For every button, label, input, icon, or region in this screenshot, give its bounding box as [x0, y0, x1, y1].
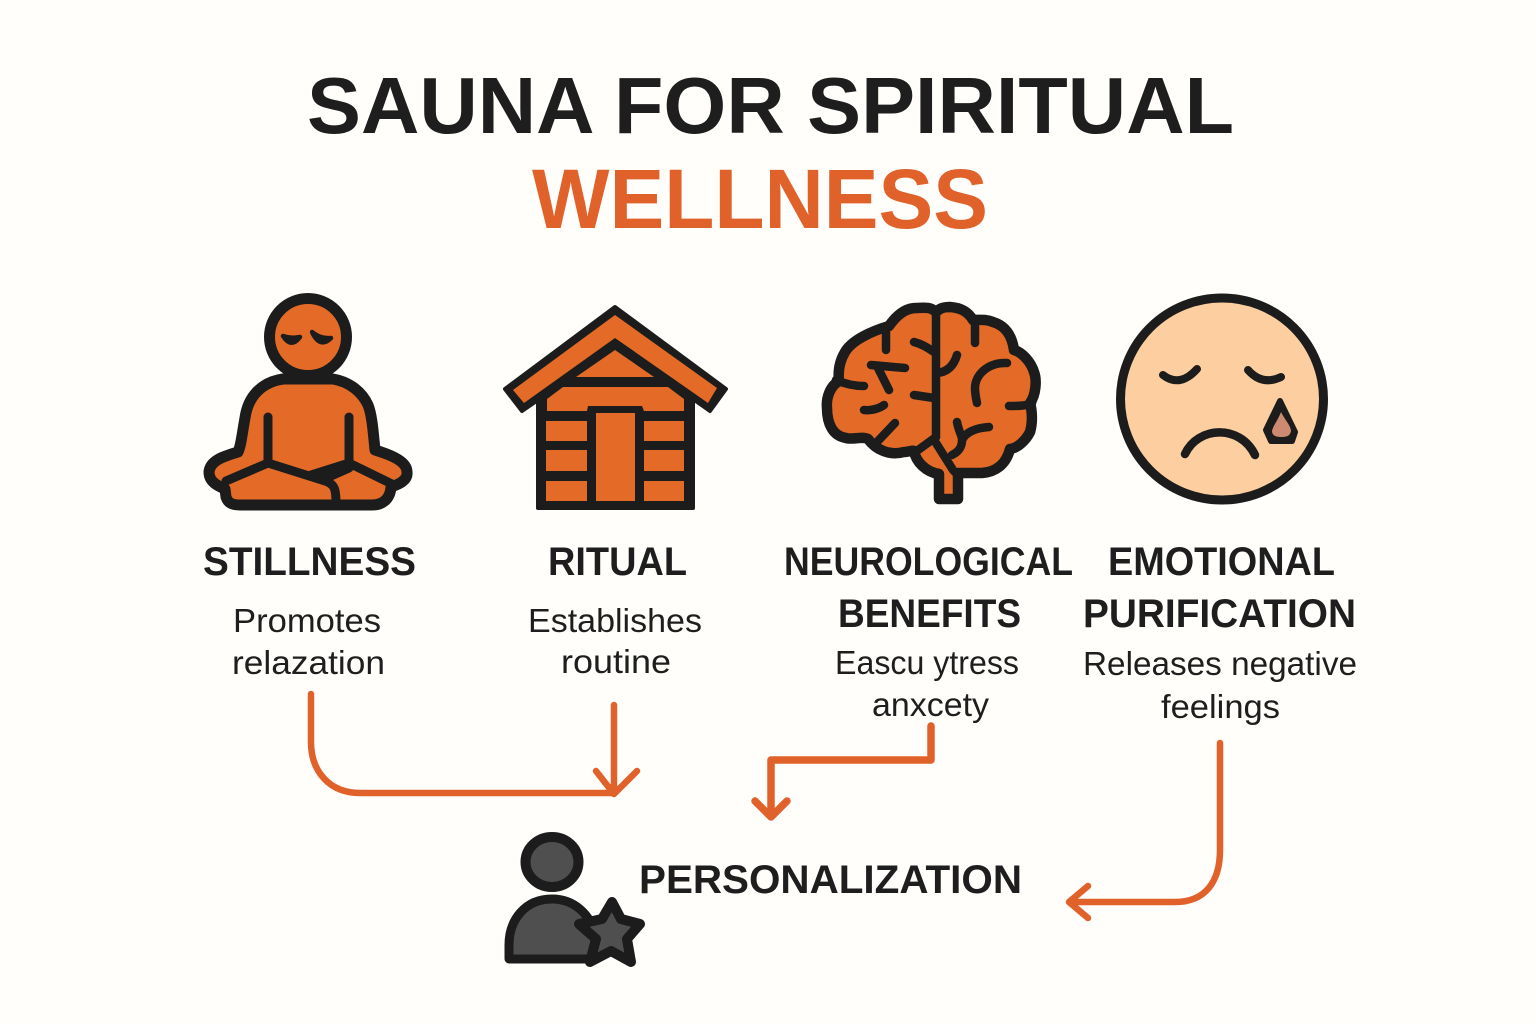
- description: releases negative feelings: [1083, 645, 1357, 725]
- icon: brain: [827, 307, 1036, 499]
- title: SAUNA FOR SPIRITUAL: [307, 61, 1234, 150]
- description: promotes relaxation: relazation: [232, 644, 385, 681]
- label: stillness: STILLNESS: [203, 540, 416, 584]
- label: neurological benefits: NEUROLOGICAL: [784, 540, 1073, 584]
- arrow: ritual down: [596, 705, 637, 794]
- description: eases stress anxiety: [835, 644, 1019, 723]
- icon: meditating figure: [209, 298, 407, 505]
- panel: ritual: [505, 307, 726, 680]
- label: emotional purification: EMOTIONAL: [1108, 540, 1335, 584]
- label: ritual: RITUAL: [548, 540, 687, 584]
- icon: person with star: [509, 837, 640, 962]
- icon: sauna cabin: [505, 307, 726, 508]
- label: neurological benefits: [784, 540, 1073, 636]
- description: promotes relaxation: Promotes: [233, 602, 381, 639]
- panel: neurological benefits: [784, 307, 1073, 723]
- description: establishes routine: [528, 602, 702, 680]
- title: WELLNESS: [532, 152, 988, 246]
- description: releases negative feelings: Releases negative: [1083, 645, 1357, 682]
- label: neurological benefits: BENEFITS: [838, 592, 1021, 636]
- description: promotes relaxation: [232, 602, 385, 681]
- arrow: emotional to personalization: [1069, 743, 1220, 918]
- label: personalization: PERSONALIZATION: [639, 858, 1022, 902]
- description: releases negative feelings: feelings: [1161, 688, 1280, 725]
- icon: crying face: [1120, 298, 1324, 500]
- label: emotional purification: PURIFICATION: [1083, 592, 1356, 636]
- title: [307, 61, 1234, 246]
- description: establishes routine: routine: [561, 643, 671, 680]
- panel: personalization: [509, 837, 1022, 962]
- description: eases stress anxiety: anxcety: [872, 686, 990, 723]
- panel: stillness: [203, 298, 416, 681]
- description: eases stress anxiety: Eascu ytress: [835, 644, 1019, 681]
- description: establishes routine: Establishes: [528, 602, 702, 639]
- panel: emotional purification: [1083, 298, 1357, 725]
- arrow: stillness to ritual: [311, 694, 614, 793]
- arrow: neurological to personalization: [755, 726, 931, 817]
- label: emotional purification: [1083, 540, 1356, 636]
